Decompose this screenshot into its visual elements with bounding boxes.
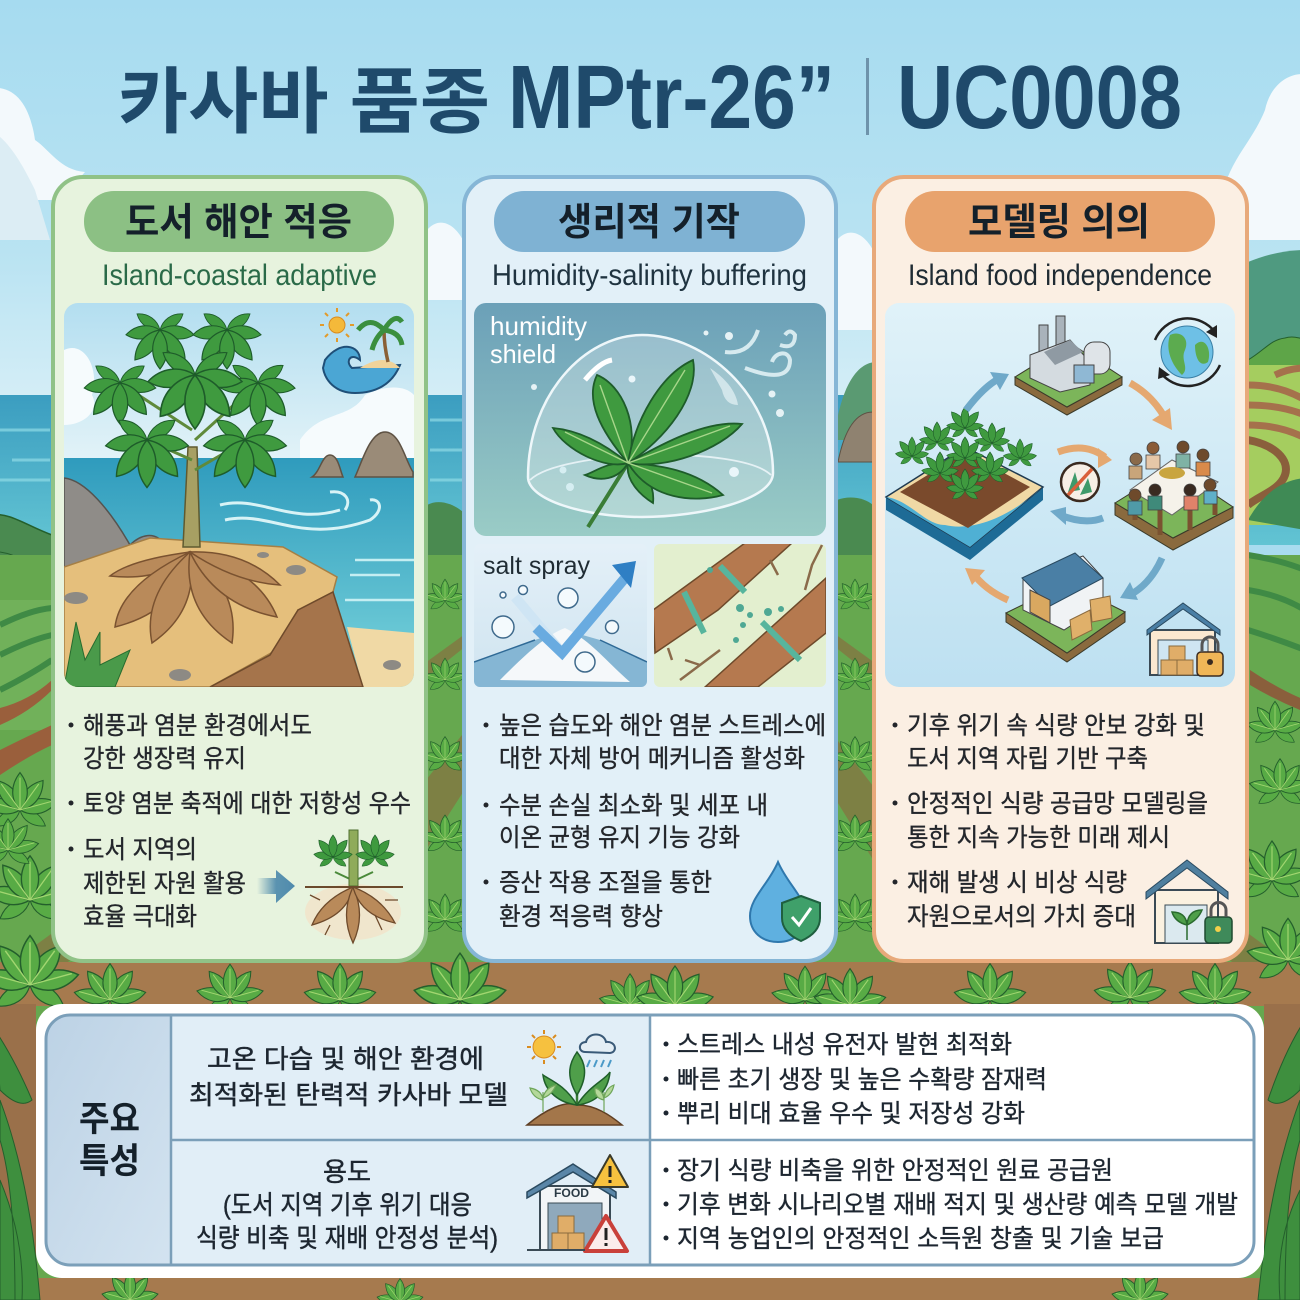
plant leaves [83, 310, 296, 488]
bullet list: genetic and yield traits: 스트레스 내성 유전자 발현 최적화 [677, 1031, 1012, 1059]
bullet list: island coastal adaptation: 효율 극대화 [83, 903, 197, 931]
illustration: humidity shield dome: shield [490, 339, 556, 369]
bullet list: physiological mechanism: 높은 습도와 해안 염분 스트레스에 [499, 712, 826, 740]
panel: modeling significance [874, 177, 1247, 961]
subtitle: island food independence: Island food independence [908, 259, 1212, 292]
bullet list: applications: 장기 식량 비축을 위한 안정적인 원료 공급원 [677, 1157, 1113, 1185]
heading: modeling significance: 모델링 의의 [968, 202, 1150, 244]
illustration: humidity shield dome: humidity [490, 311, 587, 341]
panel: key characteristics table [36, 1004, 1264, 1278]
bullet list: physiological mechanism: 증산 작용 조절을 통한 [499, 869, 712, 897]
island cassava farm [886, 407, 1043, 560]
text: intended use: 용도 [323, 1157, 371, 1187]
bullet list: island coastal adaptation: 해풍과 염분 환경에서도 [83, 712, 312, 740]
panel: physiological mechanism [464, 177, 836, 961]
heading: island coastal adaptation: 도서 해안 적응 [125, 202, 352, 244]
icon: globe with arrows [1155, 318, 1220, 386]
bullet list: modeling significance [892, 712, 1208, 931]
icon: water drop with shield [750, 862, 820, 942]
bullet list: island coastal adaptation [68, 712, 411, 931]
illustration: food system cycle [885, 303, 1235, 687]
heading: island coastal adaptation [84, 191, 394, 252]
illustration: salt spray deflection: salt spray [483, 552, 590, 580]
title [118, 48, 1182, 148]
heading: physiological mechanism: 생리적 기작 [558, 202, 740, 244]
bullet list: applications: 지역 농업인의 안정적인 소득원 창출 및 기술 보급 [677, 1225, 1164, 1253]
text: intended use [196, 1157, 498, 1253]
bullet list: modeling significance: 도서 지역 자립 기반 구축 [907, 745, 1148, 773]
illustration: humidity shield dome [474, 303, 826, 536]
title: 카사바 품종 [118, 63, 490, 143]
icon: food warehouse with warning signs [527, 1155, 628, 1251]
subtitle: island coastal adaptive: Island-coastal adaptive [102, 259, 377, 292]
bullet list: island coastal adaptation: 제한된 자원 활용 [83, 870, 246, 898]
bullet list: genetic and yield traits [664, 1031, 1047, 1128]
cycle arrows [966, 377, 1165, 600]
bullet list: physiological mechanism: 대한 자체 방어 메커니즘 활성화 [499, 745, 805, 773]
text: intended use: (도서 지역 기후 위기 대응 [223, 1190, 472, 1220]
row header: key characteristics: 주요 [79, 1100, 140, 1139]
bullet list: physiological mechanism: 이온 균형 유지 기능 강화 [499, 824, 740, 852]
bullet list: modeling significance: 통한 지속 가능한 미래 제시 [907, 824, 1170, 852]
row header: key characteristics: 특성 [79, 1142, 140, 1181]
bullet list: genetic and yield traits: 뿌리 비대 효율 우수 및 저장성 강화 [677, 1100, 1025, 1128]
bullet list: physiological mechanism: 수분 손실 최소화 및 세포 내 [499, 792, 768, 820]
bullet list: applications [664, 1157, 1238, 1253]
text: intended use: 식량 비축 및 재배 안정성 분석) [196, 1223, 498, 1253]
icon: sun, palm and wave [320, 308, 402, 393]
arrow: to small plant [257, 870, 295, 903]
panel: island coastal adaptation [53, 177, 426, 961]
bullet list: island coastal adaptation: 강한 생장력 유지 [83, 745, 246, 773]
factory [1015, 316, 1122, 415]
bullet list: physiological mechanism [484, 712, 826, 931]
icon: cassava plant with roots [305, 830, 403, 943]
bullet list: modeling significance: 재해 발생 시 비상 식량 [907, 869, 1127, 897]
text: model description: 최적화된 탄력적 카사바 모델 [189, 1080, 508, 1110]
icon: seedling with sun and rain [527, 1030, 622, 1125]
warehouse [1006, 553, 1125, 662]
bullet list: island coastal adaptation: 토양 염분 축적에 대한 저항성 우수 [83, 790, 411, 818]
icon: locked storehouse [1147, 603, 1223, 676]
bullet list: modeling significance: 자원으로서의 가치 증대 [907, 903, 1136, 931]
icon: no sign [1061, 463, 1099, 501]
title: MPtr-26” [508, 48, 835, 148]
illustration: cassava plant on coastal cliff [64, 303, 414, 687]
illustration: cassava stems with protective rings [653, 543, 826, 687]
heading: physiological mechanism [494, 191, 805, 252]
community meal table [1115, 441, 1233, 550]
text: model description [189, 1044, 508, 1110]
row header: key characteristics [79, 1100, 140, 1181]
heading: modeling significance [905, 191, 1215, 252]
icon: greenhouse with seedling and lock [1146, 860, 1232, 943]
title: UC0008 [897, 48, 1182, 148]
subtitle: humidity salinity buffering: Humidity-salinity buffering [492, 259, 807, 292]
icon: food warehouse with warning signs: FOOD [554, 1186, 589, 1200]
bullet list: modeling significance: 기후 위기 속 식량 안보 강화 및 [907, 712, 1205, 740]
text: model description: 고온 다습 및 해안 환경에 [207, 1044, 484, 1074]
bullet list: island coastal adaptation: 도서 지역의 [83, 836, 197, 864]
bullet list: modeling significance: 안정적인 식량 공급망 모델링을 [907, 790, 1208, 818]
illustration: salt spray deflection [474, 544, 647, 687]
bullet list: physiological mechanism: 환경 적응력 향상 [499, 903, 663, 931]
bullet list: genetic and yield traits: 빠른 초기 생장 및 높은 수확량 잠재력 [677, 1066, 1047, 1094]
bullet list: applications: 기후 변화 시나리오별 재배 적지 및 생산량 예측 모델 개발 [677, 1191, 1238, 1219]
